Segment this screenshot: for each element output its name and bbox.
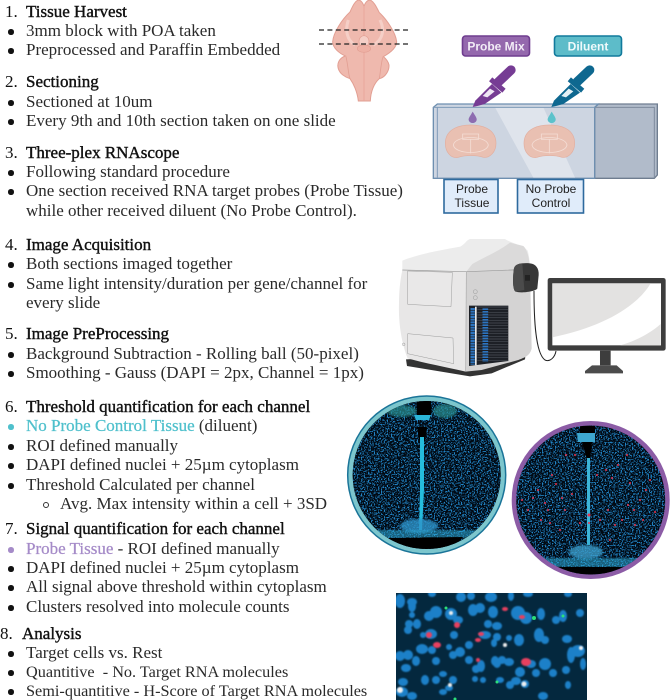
sub-bullet: Avg. Max intensity within a cell + 3SD <box>60 494 327 513</box>
label box: No Probe Control: Control <box>532 196 570 210</box>
label: Probe Mix <box>462 36 530 56</box>
heading: Signal quantification for each channel <box>26 519 285 538</box>
heading: Tissue Harvest <box>26 2 127 21</box>
label: Probe Mix: Probe Mix <box>467 40 525 54</box>
label box: No Probe Control: No Probe <box>526 182 577 196</box>
section 6: Threshold quantification: 6. <box>5 397 18 416</box>
scanner vent panel <box>469 306 508 366</box>
bullet: Following standard procedure <box>26 162 230 181</box>
scanner lid <box>402 239 530 272</box>
bullet: Sectioned at 10um <box>26 92 153 111</box>
red signal <box>426 607 531 666</box>
bullet: Probe Tissue - ROI defined manually <box>26 539 280 558</box>
heading: Analysis <box>22 624 82 643</box>
section 5: Image PreProcessing: 5. <box>5 324 18 343</box>
slide glass <box>433 104 598 178</box>
bullet: Background Subtraction - Rolling ball (50-pixel) <box>26 344 359 363</box>
section 4: Image Acquisition: 4. <box>5 235 18 254</box>
scanner base <box>406 353 526 376</box>
micrograph: no probe control circle <box>348 396 506 554</box>
bullet: Quantitive - No. Target RNA molecules <box>26 663 288 681</box>
heading: Three-plex RNAscope <box>26 143 179 162</box>
section 3: Three-plex RNAscope <box>5 143 403 220</box>
icon: brain <box>333 0 397 101</box>
section 6: Threshold quantification <box>5 397 327 513</box>
bullet: Every 9th and 10th section taken on one slide <box>26 111 336 130</box>
illustrations layer <box>319 0 670 700</box>
micrograph: RNA signal in nuclei <box>395 591 587 700</box>
bullet: 3mm block with POA taken <box>26 21 216 40</box>
section 1: Tissue Harvest <box>5 2 280 59</box>
dropper: blue <box>551 70 590 107</box>
label box: Probe Tissue <box>444 180 498 213</box>
dropper: purple <box>473 70 511 107</box>
drop: teal <box>548 112 556 123</box>
section 1: Tissue Harvest: 1. <box>5 2 18 21</box>
label box: Probe Tissue: Probe <box>456 182 488 196</box>
heading: Threshold quantification for each channel <box>26 397 310 416</box>
section 8: Analysis: 8. <box>0 624 13 643</box>
heading: Image Acquisition <box>26 235 151 254</box>
bullet: One section received RNA target probes (Probe Tissue) <box>26 181 403 200</box>
bullet: All signal above threshold within cytoplasm <box>26 577 327 596</box>
monitor <box>548 278 666 373</box>
bullet: Preprocessed and Paraffin Embedded <box>26 40 280 59</box>
section 4: Image Acquisition <box>5 235 368 312</box>
cable <box>534 291 556 361</box>
microscope slide <box>433 104 657 178</box>
section 8: Analysis <box>0 624 367 700</box>
label: Diluent <box>554 36 622 56</box>
heading: Image PreProcessing <box>26 324 169 343</box>
scanner right face <box>466 269 532 372</box>
bullet: Target cells vs. Rest <box>26 643 162 662</box>
micrograph: probe tissue circle <box>512 424 668 580</box>
bullet continuation: while other received diluent (No Probe Control). <box>26 201 357 220</box>
camera <box>513 263 539 292</box>
label box: Probe Tissue: Tissue <box>455 196 490 210</box>
bullet: Both sections imaged together <box>26 254 232 273</box>
cut line: lower <box>319 43 411 45</box>
nuclei <box>395 591 586 700</box>
bullet continuation: every slide <box>26 293 100 312</box>
section 7: Signal quantification <box>5 519 327 616</box>
section 3: Three-plex RNAscope: 3. <box>5 143 18 162</box>
section 2: Sectioning: 2. <box>5 72 18 91</box>
section 2: Sectioning <box>5 72 336 130</box>
label: Diluent: Diluent <box>568 40 608 54</box>
bullet: DAPI defined nuclei + 25µm cytoplasm <box>26 558 299 577</box>
slide frosted end <box>595 104 657 178</box>
icon: imaging scanner <box>399 239 539 376</box>
bullet: DAPI defined nuclei + 25µm cytoplasm <box>26 455 299 474</box>
cut line: upper <box>319 29 411 31</box>
section 5: Image PreProcessing <box>5 324 364 382</box>
white signal <box>397 611 583 693</box>
green signal <box>444 606 564 700</box>
bullet: Semi-quantitive - H-Score of Target RNA molecules <box>26 682 367 700</box>
drop: purple <box>469 112 477 123</box>
bullet: Clusters resolved into molecule counts <box>26 597 289 616</box>
bullet: ROI defined manually <box>26 436 178 455</box>
label box: No Probe Control <box>518 180 584 213</box>
section 7: Signal quantification: 7. <box>5 519 18 538</box>
scanner left face <box>399 270 466 372</box>
brain section: no probe control <box>524 125 575 158</box>
bullet: Same light intensity/duration per gene/channel for <box>26 274 367 293</box>
bullet: No Probe Control Tissue (diluent) <box>26 416 257 435</box>
bullet: Threshold Calculated per channel <box>26 475 255 494</box>
brain section: probe tissue <box>445 125 496 158</box>
bullet: Smoothing - Gauss (DAPI = 2px, Channel = 1px) <box>26 363 364 382</box>
droppers and tissue sections <box>445 70 590 158</box>
heading: Sectioning <box>26 72 99 91</box>
red signal dots <box>521 454 656 541</box>
